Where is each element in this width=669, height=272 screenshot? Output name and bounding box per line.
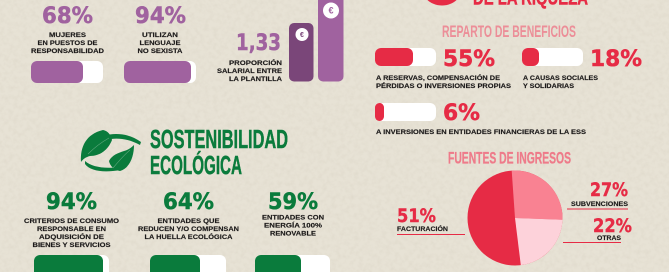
stat: 18% causas sociales: A CAUSAS SOCIALES <box>523 75 599 82</box>
stat: 1,33 proporción salarial: SALARIAL ENTRE <box>217 68 283 75</box>
stat: 94% consumo: ADQUISICIÓN DE <box>39 232 105 241</box>
icon: leaves <box>81 130 141 171</box>
bar: salary low: € <box>300 32 304 39</box>
stat: 94% consumo: BIENES Y SERVICIOS <box>32 242 111 249</box>
stat: 6% entidades financieras: 6% <box>443 100 480 126</box>
stat: 59% energía: ENTIDADES CON <box>262 214 324 222</box>
panel: igualdad <box>31 0 344 83</box>
stat: 68% mujeres <box>31 3 104 83</box>
panel: reparto de la riqueza <box>375 0 642 266</box>
stat: 6% entidades financieras <box>375 100 587 136</box>
stat: 94% consumo <box>24 189 119 272</box>
heading: sostenibilidad ecológica: SOSTENIBILIDAD <box>150 124 288 154</box>
pie chart <box>468 170 563 266</box>
subheading: reparto de beneficios: REPARTO DE BENEFICIOS <box>442 23 576 41</box>
stat: 94% consumo: RESPONSABLE EN <box>37 226 106 233</box>
panel: sostenibilidad ecológica <box>24 124 330 272</box>
stat: 59% energía <box>255 189 330 272</box>
stat: 68% mujeres: 68% <box>42 3 93 29</box>
label: 51% facturación <box>397 205 465 235</box>
stat: 18% causas sociales: Y SOLIDARIAS <box>523 83 575 90</box>
label: 51% facturación: 51% <box>397 205 436 227</box>
stat: 18% causas sociales <box>522 46 642 90</box>
stat: 59% energía: ENERGÍA 100% <box>264 220 322 230</box>
label: 27% subvenciones: 27% <box>590 179 628 201</box>
label: 22% otras: 22% <box>593 215 632 237</box>
label: 27% subvenciones <box>567 179 629 210</box>
bar: salary high: € <box>328 6 334 16</box>
label: 27% subvenciones: SUBVENCIONES <box>571 201 629 208</box>
stat: 68% mujeres: MUJERES <box>49 32 87 39</box>
heading: sostenibilidad ecológica <box>150 124 288 180</box>
stat: 55% reservas <box>375 46 512 90</box>
stat: 6% entidades financieras: A INVERSIONES EN ENTIDADES FINANCIERAS DE LA ESS <box>376 129 587 136</box>
heading: sostenibilidad ecológica: ECOLÓGICA <box>150 150 242 180</box>
stat: 94% consumo: CRITERIOS DE CONSUMO <box>24 218 119 225</box>
stat: 68% mujeres: EN PUESTOS DE <box>38 40 98 47</box>
stat: 94% lenguaje: UTILIZAN <box>142 32 178 39</box>
stat: 55% reservas: 55% <box>443 46 495 72</box>
stat: 68% mujeres: RESPONSABILIDAD <box>31 48 104 55</box>
icon: red emblem <box>426 0 458 6</box>
stat: 1,33 proporción salarial <box>217 0 344 83</box>
stat: 59% energía: 59% <box>268 189 318 215</box>
stat: 55% reservas: PÉRDIDAS O INVERSIONES PROPIAS <box>376 81 512 90</box>
label: 22% otras: OTRAS <box>597 235 622 242</box>
stat: 64% huella <box>138 189 239 272</box>
stat: 94% lenguaje: 94% <box>135 3 186 29</box>
stat: 1,33 proporción salarial: PROPORCIÓN <box>229 58 282 67</box>
stat: 94% lenguaje <box>124 3 196 83</box>
stat: 1,33 proporción salarial: LA PLANTILLA <box>229 76 282 83</box>
stat: 64% huella: REDUCEN Y/O COMPENSAN <box>138 226 239 233</box>
subheading: fuentes de ingresos: FUENTES DE INGRESOS <box>448 150 571 168</box>
stat: 94% lenguaje: NO SEXISTA <box>138 48 183 55</box>
label: 51% facturación: FACTURACIÓN <box>397 224 448 233</box>
label: 22% otras <box>563 215 632 243</box>
stat: 64% huella: LA HUELLA ECOLÓGICA <box>144 232 233 241</box>
stat: 94% consumo: 94% <box>46 189 97 215</box>
stat: 94% lenguaje: LENGUAJE <box>140 40 181 47</box>
stat: 59% energía: RENOVABLE <box>270 230 317 238</box>
stat: 64% huella: 64% <box>163 189 214 215</box>
stat: 55% reservas: A RESERVAS, COMPENSACIÓN DE <box>376 73 501 82</box>
stat: 64% huella: ENTIDADES QUE <box>158 218 220 225</box>
stat: 1,33 proporción salarial: 1,33 <box>236 30 281 56</box>
stat: 18% causas sociales: 18% <box>590 46 642 72</box>
